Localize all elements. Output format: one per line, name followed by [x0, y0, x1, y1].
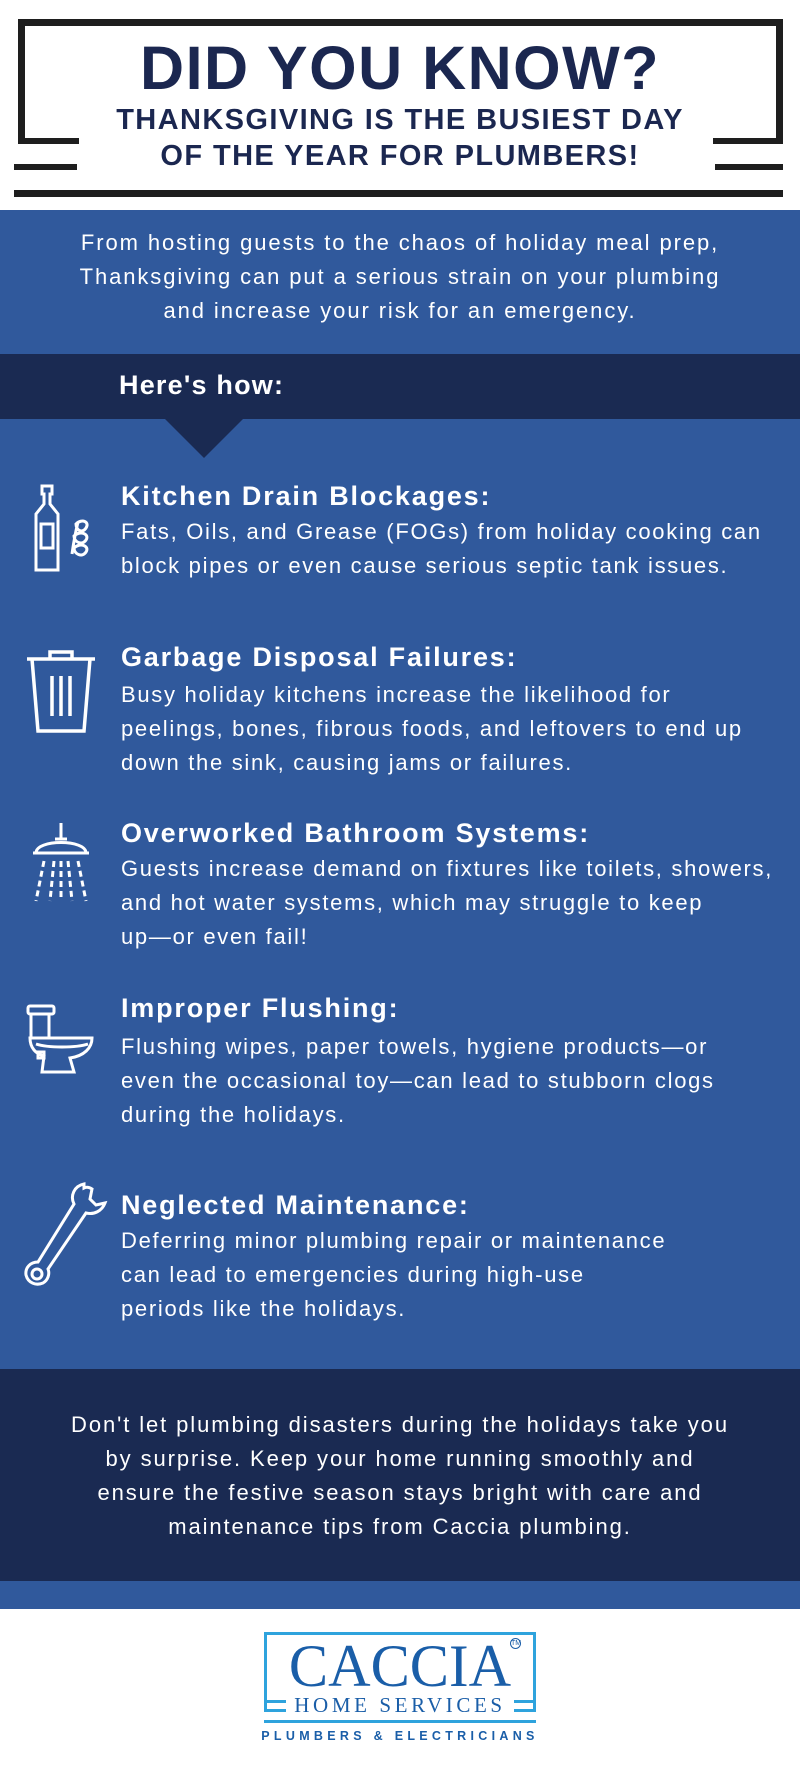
- item: flushing: [26, 993, 715, 1127]
- item: kitchen drain: Fats, Oils, and Grease (FOGs) from holiday cooking can: [121, 519, 762, 544]
- footer callout: maintenance tips from Caccia plumbing.: [168, 1514, 632, 1539]
- icon: trash can: [27, 650, 95, 733]
- item: maintenance: periods like the holidays.: [121, 1296, 406, 1321]
- item: kitchen drain: block pipes or even cause serious septic tank issues.: [121, 553, 728, 578]
- pointer triangle: [164, 418, 244, 458]
- item: bathroom: [33, 818, 773, 949]
- footer callout: ensure the festive season stays bright with care and: [97, 1480, 703, 1505]
- item: kitchen drain: Kitchen Drain Blockages:: [121, 481, 491, 511]
- item: bathroom: up—or even fail!: [121, 924, 308, 949]
- logo: TM: [511, 1640, 521, 1647]
- icon: toilet: [26, 1004, 94, 1074]
- header frame: [14, 19, 783, 197]
- item: maintenance: [24, 1182, 666, 1321]
- item: flushing: during the holidays.: [121, 1102, 346, 1127]
- intro text: From hosting guests to the chaos of holiday meal prep,: [81, 230, 719, 255]
- footer callout: [0, 1369, 800, 1581]
- logo: PLUMBERS & ELECTRICIANS: [261, 1729, 539, 1743]
- item: garbage disposal: down the sink, causing jams or failures.: [121, 750, 573, 775]
- blue background panel: [0, 210, 800, 1609]
- intro text: [80, 230, 720, 323]
- item: flushing: Flushing wipes, paper towels, hygiene products—or: [121, 1034, 708, 1059]
- footer callout: by surprise. Keep your home running smoothly and: [106, 1446, 694, 1471]
- item: maintenance: Deferring minor plumbing repair or maintenance: [121, 1228, 666, 1253]
- item: garbage disposal: peelings, bones, fibrous foods, and leftovers to end up: [121, 716, 743, 741]
- item: garbage disposal: [27, 642, 743, 775]
- icon: wrench: [24, 1182, 108, 1286]
- title: DID YOU KNOW?: [140, 34, 660, 102]
- item: maintenance: Neglected Maintenance:: [121, 1190, 470, 1220]
- icon: shower: [33, 823, 89, 902]
- here's how band: Here's how:: [119, 370, 284, 400]
- item: kitchen drain: [34, 481, 762, 578]
- subtitle: OF THE YEAR FOR PLUMBERS!: [160, 140, 640, 172]
- item: bathroom: Overworked Bathroom Systems:: [121, 818, 590, 848]
- intro text: Thanksgiving can put a serious strain on your plumbing: [80, 264, 720, 289]
- item: flushing: even the occasional toy—can lead to stubborn clogs: [121, 1068, 715, 1093]
- item: bathroom: Guests increase demand on fixtures like toilets, showers,: [121, 856, 773, 881]
- item: garbage disposal: Garbage Disposal Failures:: [121, 642, 517, 672]
- subtitle: THANKSGIVING IS THE BUSIEST DAY: [116, 104, 684, 136]
- subtitle: [116, 104, 684, 172]
- footer callout: Don't let plumbing disasters during the holidays take you: [71, 1412, 729, 1437]
- logo: HOME SERVICES: [294, 1693, 506, 1717]
- logo: CACCIA: [289, 1633, 511, 1699]
- item: flushing: Improper Flushing:: [121, 993, 399, 1023]
- item: bathroom: and hot water systems, which may struggle to keep: [121, 890, 703, 915]
- icon: bottle: [34, 484, 89, 572]
- item: garbage disposal: Busy holiday kitchens increase the likelihood for: [121, 682, 671, 707]
- intro text: and increase your risk for an emergency.: [164, 298, 636, 323]
- logo: [261, 1632, 539, 1743]
- item: maintenance: can lead to emergencies during high-use: [121, 1262, 585, 1287]
- here's how band: [0, 354, 800, 419]
